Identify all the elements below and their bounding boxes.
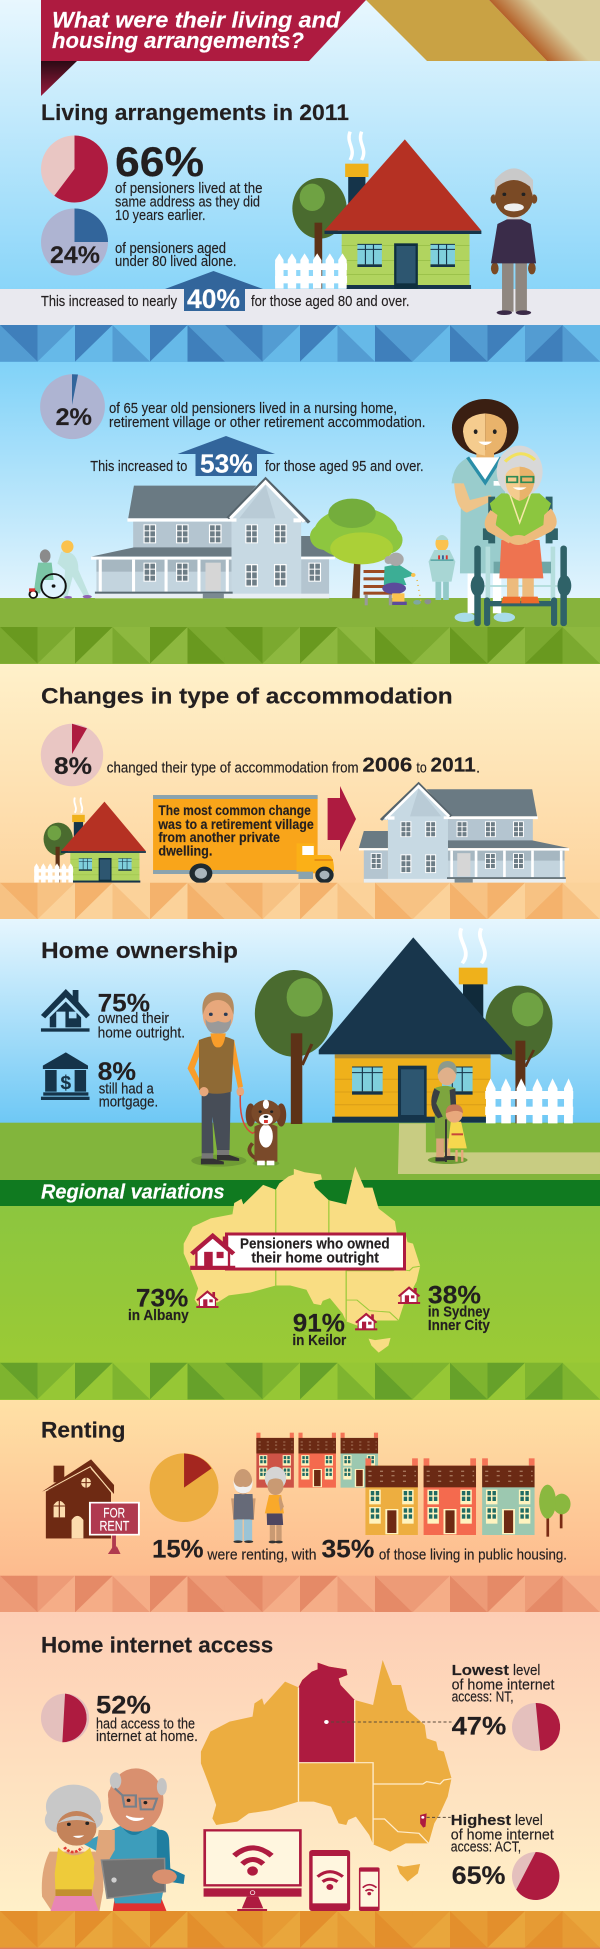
- truck text: The most common change: [158, 802, 311, 818]
- stat: 52 percent: had access to the: [96, 1715, 195, 1732]
- text: this increased to: This increased to: [90, 458, 187, 475]
- title banner: [41, 0, 366, 96]
- icon: bank: [41, 1052, 90, 1100]
- text: changed accommodation 2006 to 2011: changed their type of accommodation from: [107, 759, 359, 776]
- nurse carrying tray: [429, 535, 455, 600]
- pie chart: 52 percent: [41, 1694, 89, 1742]
- device: tablet with wifi: [309, 1850, 350, 1911]
- pie chart: 2 percent: 2%: [56, 404, 92, 431]
- text: highest level ACT: [451, 1812, 555, 1890]
- truck text: from another private: [158, 829, 280, 845]
- up arrow with 53 percent: 53%: [200, 449, 253, 479]
- triangle band: orange: [0, 1911, 600, 1949]
- moving truck: [153, 795, 334, 883]
- stat: 52 percent: 52%: [96, 1691, 151, 1719]
- text: lowest level NT: [452, 1662, 555, 1740]
- large nurse and resident in wheelchair: [452, 399, 571, 623]
- elderly couple: [231, 1467, 286, 1543]
- stat: Albany: in Albany: [128, 1307, 189, 1324]
- pie chart: 24 percent: [41, 208, 108, 276]
- text: highest level ACT: 65%: [452, 1862, 506, 1890]
- yellow house: [319, 928, 512, 1123]
- couple with tablet: [42, 1768, 185, 1911]
- panel: nursing home and retirement: [0, 362, 600, 628]
- heading: home internet access: Home internet access: [41, 1633, 273, 1658]
- for rent house and sign: FOR: [103, 1505, 125, 1521]
- stat: 66 percent: of pensioners lived at the: [115, 180, 262, 197]
- panel: regional variations: [0, 1167, 600, 1363]
- text: highest level ACT: level: [515, 1812, 543, 1829]
- triangle band: blue: [0, 325, 600, 362]
- device: phone with wifi: [359, 1867, 380, 1911]
- stat: 15 percent renting, 35 percent public housing: [152, 1535, 567, 1563]
- stat: Sydney: in Sydney: [428, 1304, 490, 1321]
- stat: 15 percent renting, 35 percent public housing: of those living in public housing.: [379, 1546, 567, 1563]
- heading: living arrangements: Living arrangements in 2011: [41, 100, 349, 125]
- pie chart: 66 percent: [41, 136, 108, 202]
- panel: renting: [0, 1400, 600, 1576]
- pie chart: 65 percent: [512, 1852, 559, 1900]
- text: lowest level NT: access: NT,: [452, 1689, 514, 1706]
- icon: house: [41, 989, 90, 1032]
- illustration: house, tree, fence: [275, 132, 481, 289]
- for rent house and sign: [42, 1459, 139, 1554]
- stat: 8 percent: still had a: [99, 1080, 154, 1097]
- label: pensioners who owned their home outright: Pensioners who owned: [240, 1236, 390, 1252]
- triangle band: green: [0, 1363, 600, 1400]
- triangle band: salmon: [0, 1576, 600, 1612]
- stat: 24 percent text: of pensioners aged: [115, 240, 226, 257]
- pie chart: 8 percent: 8%: [54, 753, 92, 780]
- resident: [507, 573, 518, 597]
- wheelchair rear bars: [492, 497, 549, 543]
- stat: Albany: 73%: [136, 1285, 188, 1313]
- man with dog: [187, 992, 286, 1167]
- grandmother and child: [428, 1061, 468, 1164]
- text: changed accommodation 2006 to 2011: .: [476, 759, 480, 776]
- heading: home ownership: Home ownership: [41, 938, 238, 963]
- trees: [255, 970, 553, 1124]
- terrace houses: [256, 1433, 535, 1535]
- arrow: right: [328, 786, 356, 852]
- truck text: [158, 802, 314, 859]
- title banner: What were their living and: [52, 8, 341, 32]
- icon: house at Albany: [196, 1292, 218, 1308]
- stat: 52 percent: [96, 1691, 198, 1745]
- stat: 75 percent: [98, 990, 185, 1041]
- text: aged 80 and over: for those aged 80 and over.: [251, 293, 410, 310]
- stat: Albany: [128, 1285, 189, 1324]
- stat: 75 percent: owned their: [98, 1010, 169, 1027]
- up arrow with 53 percent: [178, 436, 275, 479]
- tree: [310, 499, 403, 598]
- text: changed accommodation 2006 to 2011: 2006: [362, 755, 412, 777]
- panel: home internet access: [0, 1612, 600, 1912]
- stat: 66 percent: 66%: [115, 138, 204, 185]
- truck text: was to a retirement village: [158, 816, 314, 832]
- white picket fence: [485, 1078, 573, 1123]
- trees: [539, 1485, 571, 1537]
- label: pensioners who owned their home outright: [226, 1234, 404, 1269]
- text: lowest level NT: level: [513, 1662, 540, 1679]
- stat: 66 percent: [115, 138, 262, 224]
- woman on bench feeding birds: [364, 553, 431, 605]
- stat: Keilor: in Keilor: [292, 1332, 346, 1349]
- panel: living arrangements in 2011: [0, 0, 600, 325]
- stat: 15 percent renting, 35 percent public housing: were renting, with: [206, 1546, 316, 1563]
- stat: 8 percent: [98, 1058, 158, 1111]
- up arrow with 40 percent: [165, 271, 263, 314]
- decorative roof shapes at top right: [366, 0, 600, 61]
- stat: Sydney: Inner City: [428, 1317, 490, 1334]
- stat: 66 percent: 10 years earlier.: [115, 207, 206, 224]
- text: changed accommodation 2006 to 2011: to: [416, 759, 427, 776]
- small house illustration: [34, 798, 146, 883]
- illustration: retirement village building: [91, 478, 335, 598]
- pie chart: 47 percent: [512, 1703, 560, 1751]
- person in wheelchair with carer: [29, 540, 92, 599]
- stat: 8 percent: mortgage.: [99, 1094, 158, 1111]
- text: changed accommodation 2006 to 2011: [107, 755, 480, 777]
- stat: Keilor: 91%: [293, 1310, 345, 1338]
- icon: bank: $: [61, 1073, 72, 1094]
- text: lowest level NT: Lowest: [452, 1662, 509, 1679]
- stat: 24 percent text: under 80 lived alone.: [115, 253, 236, 270]
- text: 2 percent description: of 65 year old pensioners lived in a nursing home,: [109, 400, 397, 417]
- text: highest level ACT: Highest: [451, 1812, 511, 1829]
- panel: changes in type of accommodation: [0, 664, 600, 883]
- stat: 8 percent: 8%: [98, 1058, 136, 1086]
- pie chart: 15 percent: [150, 1453, 218, 1522]
- text: lowest level NT: 47%: [452, 1712, 506, 1740]
- triangle band: peach: [0, 883, 600, 919]
- tablet: [101, 1858, 165, 1898]
- text: highest level ACT: of home internet: [451, 1826, 555, 1843]
- stat: 75 percent: 75%: [98, 990, 150, 1018]
- heading: renting: Renting: [41, 1418, 126, 1443]
- heading: regional variations: Regional variations: [41, 1181, 225, 1203]
- map of Australia: [184, 1167, 420, 1353]
- map of Australia with NT highlighted: [201, 1660, 452, 1882]
- retirement village building: [359, 783, 569, 883]
- text: highest level ACT: access: ACT,: [451, 1839, 521, 1856]
- text: aged 95 and over: for those aged 95 and over.: [265, 458, 424, 475]
- stat: 15 percent renting, 35 percent public housing: 15%: [152, 1535, 204, 1563]
- stat: 75 percent: home outright.: [98, 1024, 185, 1041]
- text: lowest level NT: of home internet: [452, 1676, 555, 1693]
- stat: Sydney: 38%: [428, 1281, 481, 1309]
- text: increased to nearly: This increased to nearly: [41, 293, 177, 310]
- title banner: housing arrangements?: [52, 28, 304, 53]
- device: desktop monitor with wifi: [204, 1830, 302, 1911]
- text: 2 percent description: [109, 400, 426, 431]
- icon: house at Sydney: [398, 1288, 420, 1304]
- triangle band: green: [0, 627, 600, 664]
- stat: 52 percent: internet at home.: [96, 1728, 198, 1745]
- pie chart: 24 percent: 24%: [50, 242, 100, 269]
- stat: 66 percent: same address as they did: [115, 194, 260, 210]
- text: 2 percent description: retirement village or other retirement accommodation.: [109, 414, 426, 431]
- pie chart: 8 percent: [41, 724, 103, 786]
- icon: house at Keilor: [355, 1314, 377, 1330]
- icon: large red house: [190, 1236, 235, 1270]
- woman: [42, 1852, 103, 1911]
- text: changed accommodation 2006 to 2011: 2011: [430, 755, 476, 777]
- stat: Sydney: [428, 1281, 490, 1334]
- heading: changes: Changes in type of accommodation: [41, 683, 453, 708]
- pie chart: 2 percent: [40, 374, 105, 439]
- stat: Keilor: [292, 1310, 346, 1349]
- truck text: dwelling.: [158, 843, 212, 859]
- footpath: [398, 1123, 600, 1174]
- panel: home ownership: [0, 919, 600, 1181]
- up arrow with 40 percent: 40%: [187, 284, 240, 314]
- stat: 15 percent renting, 35 percent public housing: 35%: [322, 1535, 374, 1563]
- grey band: [0, 289, 600, 325]
- man standing: [491, 168, 537, 315]
- stat: 24 percent text: [115, 240, 236, 270]
- for rent house and sign: RENT: [100, 1518, 130, 1534]
- label: pensioners who owned their home outright: their home outright: [251, 1251, 379, 1267]
